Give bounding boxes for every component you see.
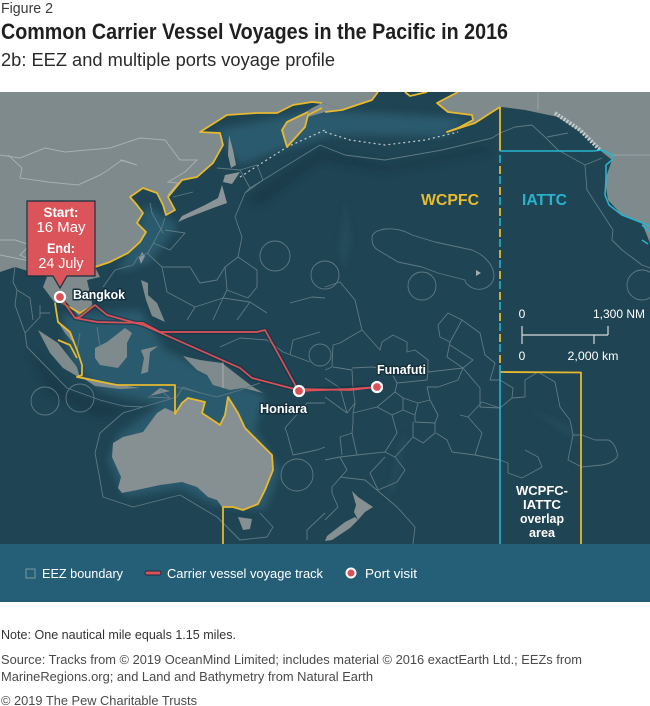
note: Note: One nautical mile equals 1.15 miles. bbox=[1, 628, 236, 642]
panel: legend bbox=[0, 544, 650, 602]
source bbox=[1, 653, 582, 684]
source: MarineRegions.org; and Land and Bathymetry from Natural Earth bbox=[1, 670, 373, 684]
land: Japan, Sakhalin, Taiwan bbox=[139, 135, 240, 264]
legend: voyage track: Carrier vessel voyage track bbox=[167, 566, 323, 581]
land: Philippines and Indonesia bbox=[38, 280, 263, 396]
label: overlap area: IATTC bbox=[523, 497, 562, 512]
ocean background bbox=[0, 92, 650, 544]
continental shelf shading bbox=[62, 110, 470, 510]
source: Source: Tracks from © 2019 OceanMind Limited; includes material © 2016 exactEarth Ltd.; EEZs from bbox=[1, 653, 582, 667]
Aleutian island chain bbox=[240, 130, 458, 177]
EEZ boundaries bbox=[13, 125, 650, 544]
label: WCPFC: WCPFC bbox=[421, 192, 479, 209]
title: Common Carrier Vessel Voyages in the Pacific in 2016 bbox=[1, 19, 508, 44]
label: overlap area: overlap bbox=[520, 511, 564, 526]
label: overlap area: WCPFC- bbox=[516, 483, 568, 498]
figure label: Figure 2 bbox=[1, 1, 53, 17]
callout: voyage dates: 16 May bbox=[36, 220, 86, 236]
scale bar: 0 bbox=[519, 307, 526, 321]
port marker: Bangkok bbox=[55, 292, 65, 302]
legend: port visit: Port visit bbox=[365, 566, 417, 581]
land: Alaska and North America bbox=[437, 92, 650, 243]
callout: voyage dates: End: bbox=[47, 240, 75, 256]
voyage tracks bbox=[60, 297, 377, 391]
subtitle: 2b: EEZ and multiple ports voyage profile bbox=[1, 50, 335, 70]
land: Australia bbox=[112, 397, 273, 510]
national borders bbox=[0, 92, 650, 388]
callout: voyage dates bbox=[27, 201, 95, 288]
port label: Bangkok: Bangkok bbox=[73, 287, 126, 302]
scale bar: 2,000 km bbox=[568, 349, 619, 363]
port marker: Honiara bbox=[294, 386, 304, 396]
legend: EEZ boundary: EEZ boundary bbox=[42, 566, 123, 581]
label: overlap area bbox=[516, 486, 568, 537]
scale bar: 1,300 NM bbox=[593, 307, 645, 321]
label: IATTC: IATTC bbox=[522, 192, 567, 209]
land: Tasmania bbox=[238, 517, 252, 530]
panel: map bbox=[0, 92, 650, 544]
callout: voyage dates: 24 July bbox=[38, 256, 84, 272]
port marker: Funafuti bbox=[372, 382, 382, 392]
scale bar: 0 bbox=[519, 349, 526, 363]
callout: voyage dates: Start: bbox=[44, 204, 78, 220]
land: New Zealand bbox=[325, 491, 373, 541]
land: Asia and Russia bbox=[0, 92, 378, 317]
land: Hawaii bbox=[476, 270, 481, 276]
WCPFC boundary lines bbox=[55, 92, 581, 544]
Canadian coast fringe bbox=[555, 113, 600, 150]
label: overlap area: area bbox=[529, 525, 556, 540]
IATTC boundary lines bbox=[500, 150, 650, 544]
port label: Honiara: Honiara bbox=[260, 401, 308, 416]
port label: Funafuti: Funafuti bbox=[377, 362, 426, 377]
land: Kamchatka bbox=[282, 103, 342, 147]
scale bar bbox=[519, 307, 645, 363]
